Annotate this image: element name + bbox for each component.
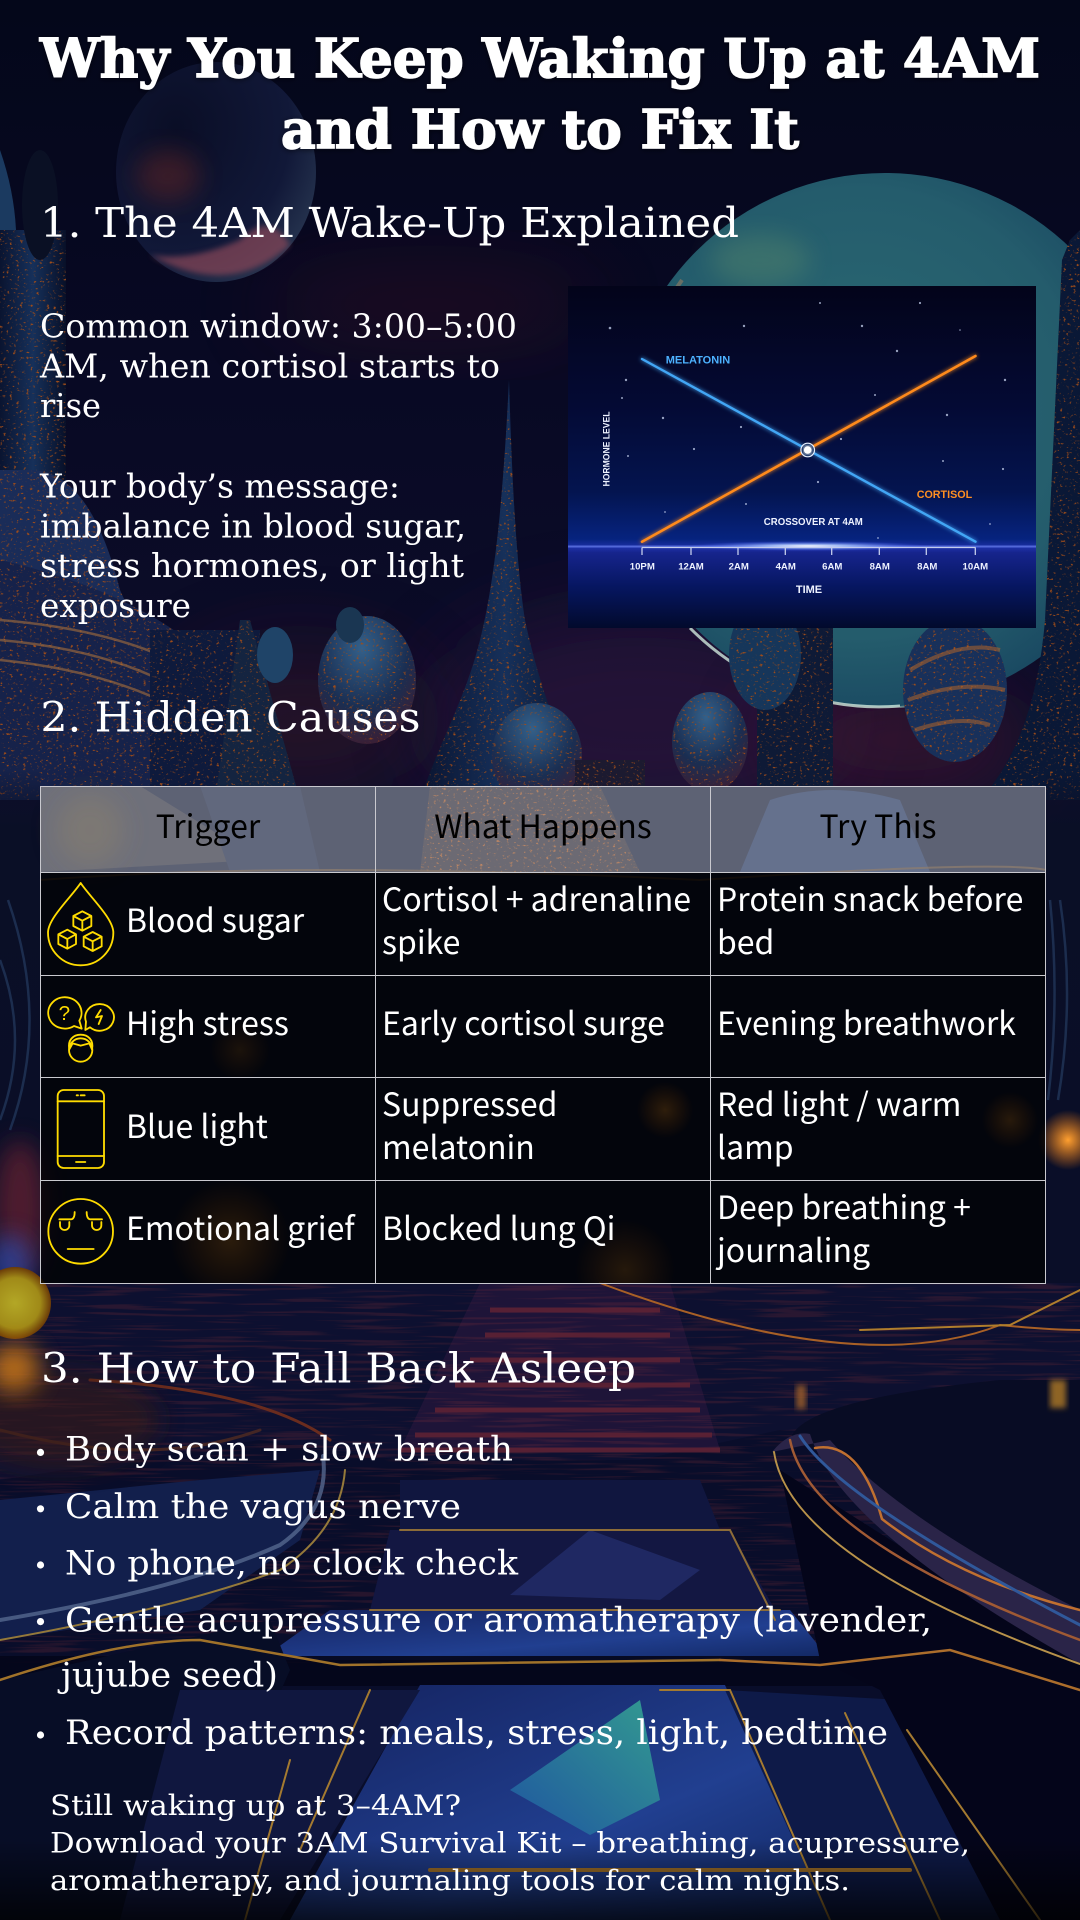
right towers [729, 230, 1080, 800]
table: hidden causes: Blocked lung Qi [382, 1204, 615, 1250]
table: hidden causes: Blood sugar [126, 896, 304, 942]
heading: section 2: 2. Hidden Causes [40, 694, 420, 742]
call to action: Download your 3AM Survival Kit – breathing, acupressure, [50, 1826, 970, 1860]
tick labels: 4AM [776, 562, 796, 572]
table: hidden causes: Deep breathing + journaling [717, 1183, 971, 1272]
bullet list: falling back asleep: No phone, no clock check [65, 1544, 519, 1583]
table: hidden causes: Blue light [126, 1102, 268, 1148]
tick labels: 10AM [963, 562, 988, 572]
cortisol line [642, 356, 976, 542]
bullet list: falling back asleep [37, 1430, 932, 1752]
text block: explanation: Your body’s message: [39, 466, 400, 506]
right planet [618, 173, 1080, 707]
table backdrop [0, 770, 1080, 1320]
table: hidden causes: Emotional grief [126, 1204, 355, 1250]
table: hidden causes: Red light / warm lamp [717, 1080, 961, 1169]
text block: explanation: AM, when cortisol starts to [39, 346, 500, 386]
table: hidden causes: Protein snack before bed [717, 875, 1023, 964]
icon: phone [58, 1090, 104, 1168]
table: hidden causes: Suppressed melatonin [382, 1080, 558, 1169]
icon: sad face [48, 1199, 113, 1264]
bullet list: falling back asleep: Body scan + slow breath [65, 1430, 513, 1469]
tick labels: 8AM [870, 562, 890, 572]
tick labels: 10PM [630, 562, 655, 572]
text block: explanation: imbalance in blood sugar, [40, 506, 466, 545]
title: Why You Keep Waking Up at 4AM [39, 28, 1040, 90]
spheres [257, 607, 748, 792]
table: hidden causes: High stress [126, 999, 289, 1045]
chart: melatonin and cortisol crossover: CORTISOL [917, 489, 972, 501]
text block: explanation [39, 306, 517, 625]
call to action: aromatherapy, and journaling tools for calm nights. [50, 1864, 850, 1897]
bullet list: falling back asleep: Record patterns: meals, stress, light, bedtime [65, 1713, 888, 1752]
bullet list: falling back asleep: Gentle acupressure or aromatherapy (lavender, [65, 1600, 932, 1640]
horizon glow [568, 546, 1036, 548]
text block: explanation: rise [40, 386, 101, 425]
icon: stress bubbles and head: ? [59, 1002, 70, 1025]
series labels: MELATONIN [666, 354, 730, 366]
table: hidden causes: Trigger [156, 802, 260, 848]
floor glow lines [0, 1283, 1080, 1920]
table: hidden causes [40, 786, 1046, 1284]
heading: section 3: 3. How to Fall Back Asleep [41, 1344, 636, 1392]
crossover marker [801, 443, 814, 457]
bullet list: falling back asleep: Calm the vagus nerve [65, 1487, 461, 1526]
text block: explanation: stress hormones, or light [40, 546, 464, 585]
chart: melatonin and cortisol crossover: HORMONE LEVEL [601, 411, 611, 486]
table: hidden causes: Cortisol + adrenaline spike [382, 875, 691, 964]
call to action [50, 1789, 970, 1897]
floor: perspective stairs and panels [0, 1267, 1080, 1920]
text block: explanation: Common window: 3:00–5:00 [40, 306, 517, 346]
call to action: Still waking up at 3–4AM? [50, 1789, 461, 1822]
table: hidden causes: Try This [819, 802, 937, 848]
tick labels: 6AM [822, 562, 842, 572]
x axis [642, 548, 976, 555]
heading: section 1: 1. The 4AM Wake-Up Explained [40, 199, 739, 247]
icon: stress bubbles and head [48, 997, 114, 1062]
chart: melatonin and cortisol crossover: CROSSOVER AT 4AM [764, 517, 863, 528]
table: hidden causes: Evening breathwork [717, 999, 1016, 1045]
stars [609, 302, 1006, 539]
central spire [420, 380, 645, 807]
icon: sugar drop [48, 883, 113, 965]
tick labels: 12AM [678, 562, 704, 572]
tick labels: 2AM [729, 562, 749, 572]
bullet list: falling back asleep: jujube seed) [57, 1656, 278, 1695]
text block: explanation: exposure [40, 586, 191, 625]
tick labels: 8AM [917, 562, 937, 572]
title: and How to Fix It [281, 99, 800, 161]
chart: melatonin and cortisol crossover: TIME [796, 584, 822, 596]
icons for table rows [47, 882, 115, 1265]
table: hidden causes: What Happens [434, 802, 652, 848]
melatonin line [642, 359, 976, 542]
left buildings [0, 150, 300, 800]
left planet [116, 62, 316, 282]
chart: melatonin and cortisol crossover [568, 286, 1036, 628]
title [39, 28, 1040, 161]
tick labels [630, 563, 988, 570]
table: hidden causes: Early cortisol surge [382, 999, 665, 1045]
